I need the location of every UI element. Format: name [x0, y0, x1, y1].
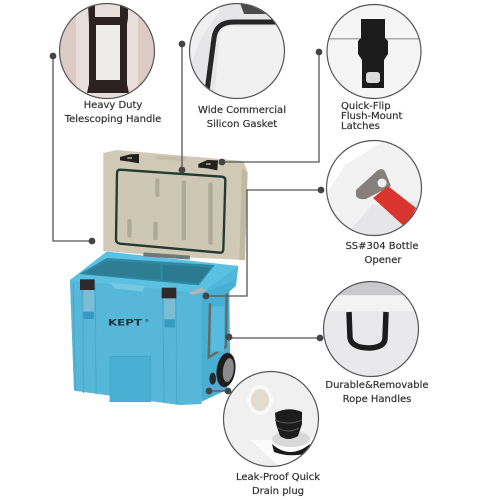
panel: silicon gasket: [189, 3, 286, 130]
caption: Opener: [365, 255, 402, 266]
leader line: rope handles: [226, 334, 323, 341]
panel: rope handles: [323, 281, 429, 405]
panel: drain plug: [223, 371, 320, 497]
icon: drain plug photo: [223, 371, 319, 467]
caption: Silicon Gasket: [207, 119, 277, 130]
caption: Heavy Duty: [84, 100, 142, 111]
caption: Wide Commercial: [198, 105, 286, 116]
icon: handle photo: [59, 3, 155, 99]
leader line: bottle opener: [203, 187, 324, 299]
KEPT logo: KEPT: [108, 318, 142, 328]
panel: latches: [327, 4, 421, 132]
cooler illustration: [70, 150, 248, 405]
caption: Telescoping Handle: [64, 114, 161, 125]
panel: telescoping handle: [59, 3, 161, 125]
caption: Durable&Removable: [325, 380, 429, 391]
cooler body: [70, 252, 238, 405]
caption: SS#304 Bottle: [345, 241, 419, 252]
icon: latch photo: [327, 5, 421, 99]
caption: Latches: [341, 121, 380, 132]
caption: Leak-Proof Quick: [236, 472, 320, 483]
leader line: silicon gasket: [179, 41, 185, 173]
panel: bottle opener: [326, 140, 422, 266]
caption: Drain plug: [252, 486, 304, 497]
cooler body: ®: [144, 318, 149, 325]
icon: rope handle photo: [323, 281, 419, 377]
caption: Rope Handles: [343, 394, 411, 405]
cooler lid: [103, 150, 248, 260]
infographic: cooler feature diagram: [50, 2, 428, 496]
leader line: drain plug: [206, 388, 231, 394]
caption: Flush-Mount: [341, 111, 402, 122]
caption: Quick-Flip: [341, 101, 391, 112]
leader line: latches: [219, 49, 322, 165]
icon: gasket photo: [189, 3, 285, 99]
leader line: telescoping handle: [50, 53, 95, 244]
icon: opener photo: [326, 140, 422, 236]
